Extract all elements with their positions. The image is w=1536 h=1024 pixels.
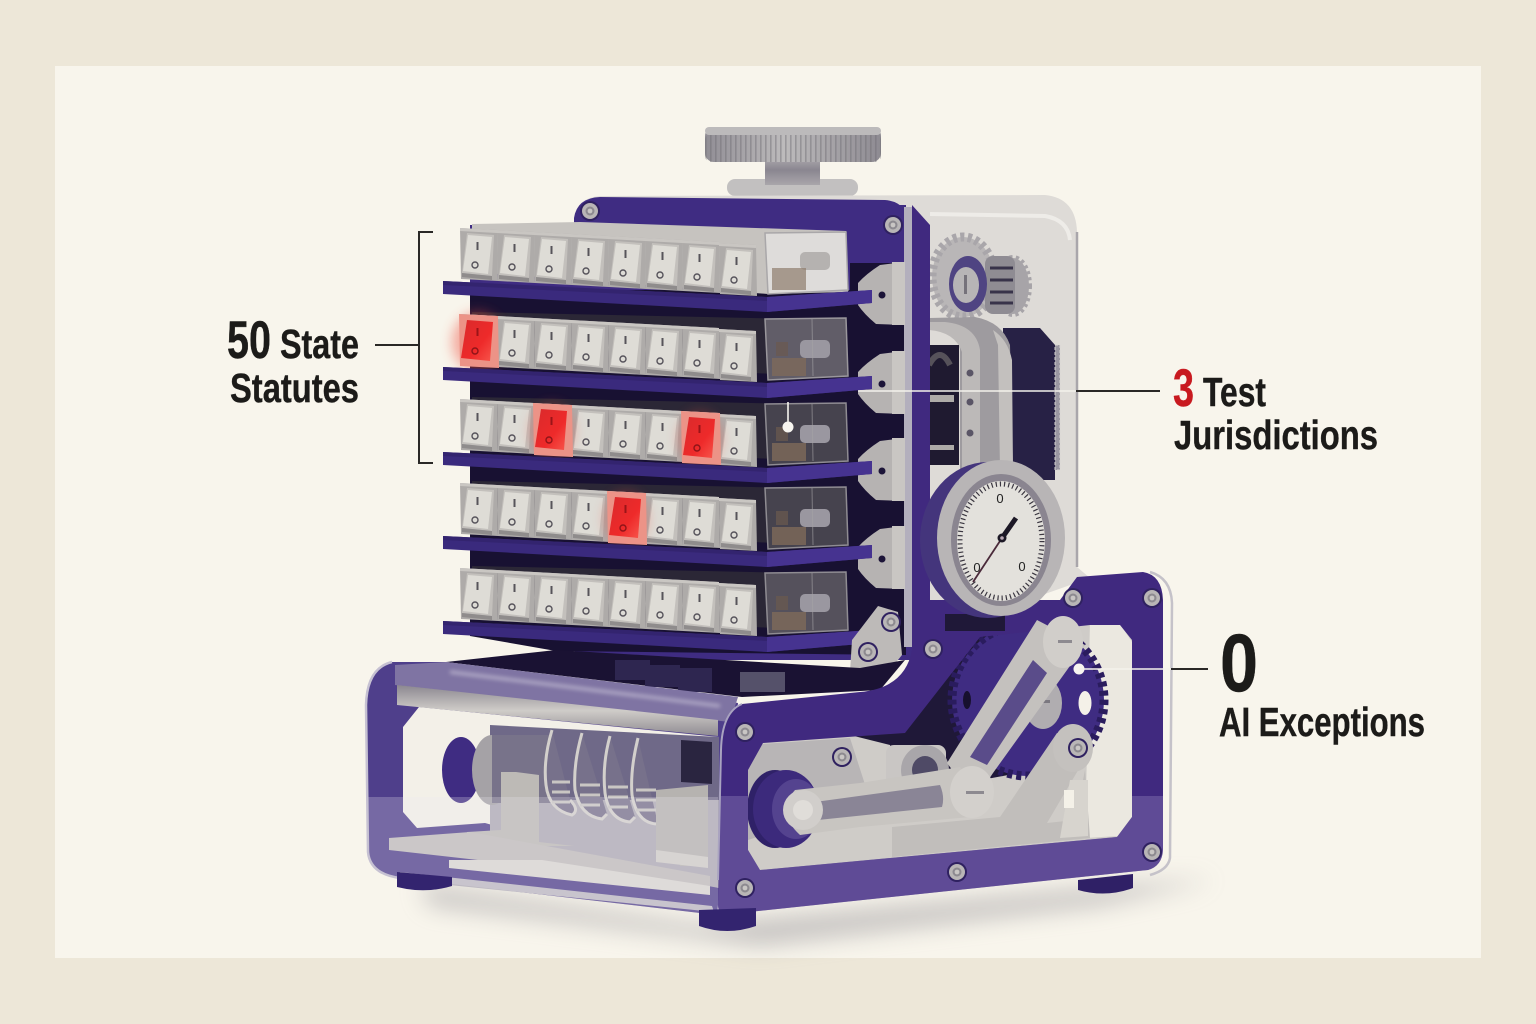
glass top band: [395, 662, 738, 722]
machine illustration: [366, 127, 1215, 945]
linkage arms: [783, 616, 1093, 835]
pressure gauge: 0: [973, 560, 981, 575]
pressure gauge: [920, 460, 1065, 618]
bracket: [375, 232, 433, 463]
base window: [403, 707, 719, 888]
callout: 0 AI exceptions: AI Exceptions: [1219, 699, 1425, 745]
callout: 3 test jurisdictions: Test: [1203, 369, 1266, 415]
leader line: [1074, 664, 1208, 674]
callout: 50 state statutes: [227, 232, 433, 463]
front purple plate: [718, 205, 1163, 914]
rear purple plate and dark interior: [470, 197, 912, 660]
barrel motor: [747, 770, 820, 848]
callout: 50 state statutes: State: [280, 321, 359, 367]
belt housing and dark block: [929, 317, 1060, 480]
front window background: [748, 620, 1136, 880]
housing edge highlight: [366, 662, 400, 878]
callout: 0 AI exceptions: [1074, 618, 1425, 745]
dark strip under gauge: [945, 614, 1005, 631]
drum and cams: [442, 730, 708, 868]
row 3 with two lit switches: [443, 397, 872, 483]
row 4 with one lit switch: [443, 481, 872, 567]
rear clear casing: [575, 195, 1090, 640]
pressure gauge: 0: [1018, 559, 1026, 574]
callout: 0 AI exceptions: 0: [1220, 618, 1258, 709]
lower tint: [366, 797, 718, 915]
upper gear assembly: [932, 237, 1029, 317]
large purple gear: [952, 624, 1104, 776]
pressure gauge: 0: [996, 491, 1004, 506]
row 2 with one lit switch: [443, 312, 872, 398]
base: dark interior: [446, 650, 905, 697]
top knob: [705, 127, 881, 196]
switch rack: five rows of eight rockers on purple shelves: [443, 222, 872, 652]
callout: 3 test jurisdictions: 3: [1173, 359, 1194, 418]
gray base block: [892, 733, 1090, 857]
lower gray arm under shelves: [850, 606, 902, 686]
feet: [397, 872, 1133, 931]
base: clear housing with mechanism: [366, 662, 738, 915]
ground shadow: [420, 880, 1215, 945]
rear rod: [397, 685, 718, 736]
callout: 50 state statutes: Statutes: [230, 365, 359, 411]
row 1: [443, 222, 872, 312]
shelf side brackets: [858, 262, 905, 589]
row 5: [443, 566, 872, 652]
lower plate tint: [718, 796, 1163, 911]
callout: 3 test jurisdictions: [782, 359, 1378, 458]
base plates: [389, 832, 710, 886]
leader lines: [782, 391, 1160, 432]
screws: [580, 201, 1162, 898]
callout: 3 test jurisdictions: Jurisdictions: [1174, 412, 1378, 458]
callout: 50 state statutes: 50: [227, 311, 271, 370]
plate clear edge: [1150, 572, 1172, 875]
